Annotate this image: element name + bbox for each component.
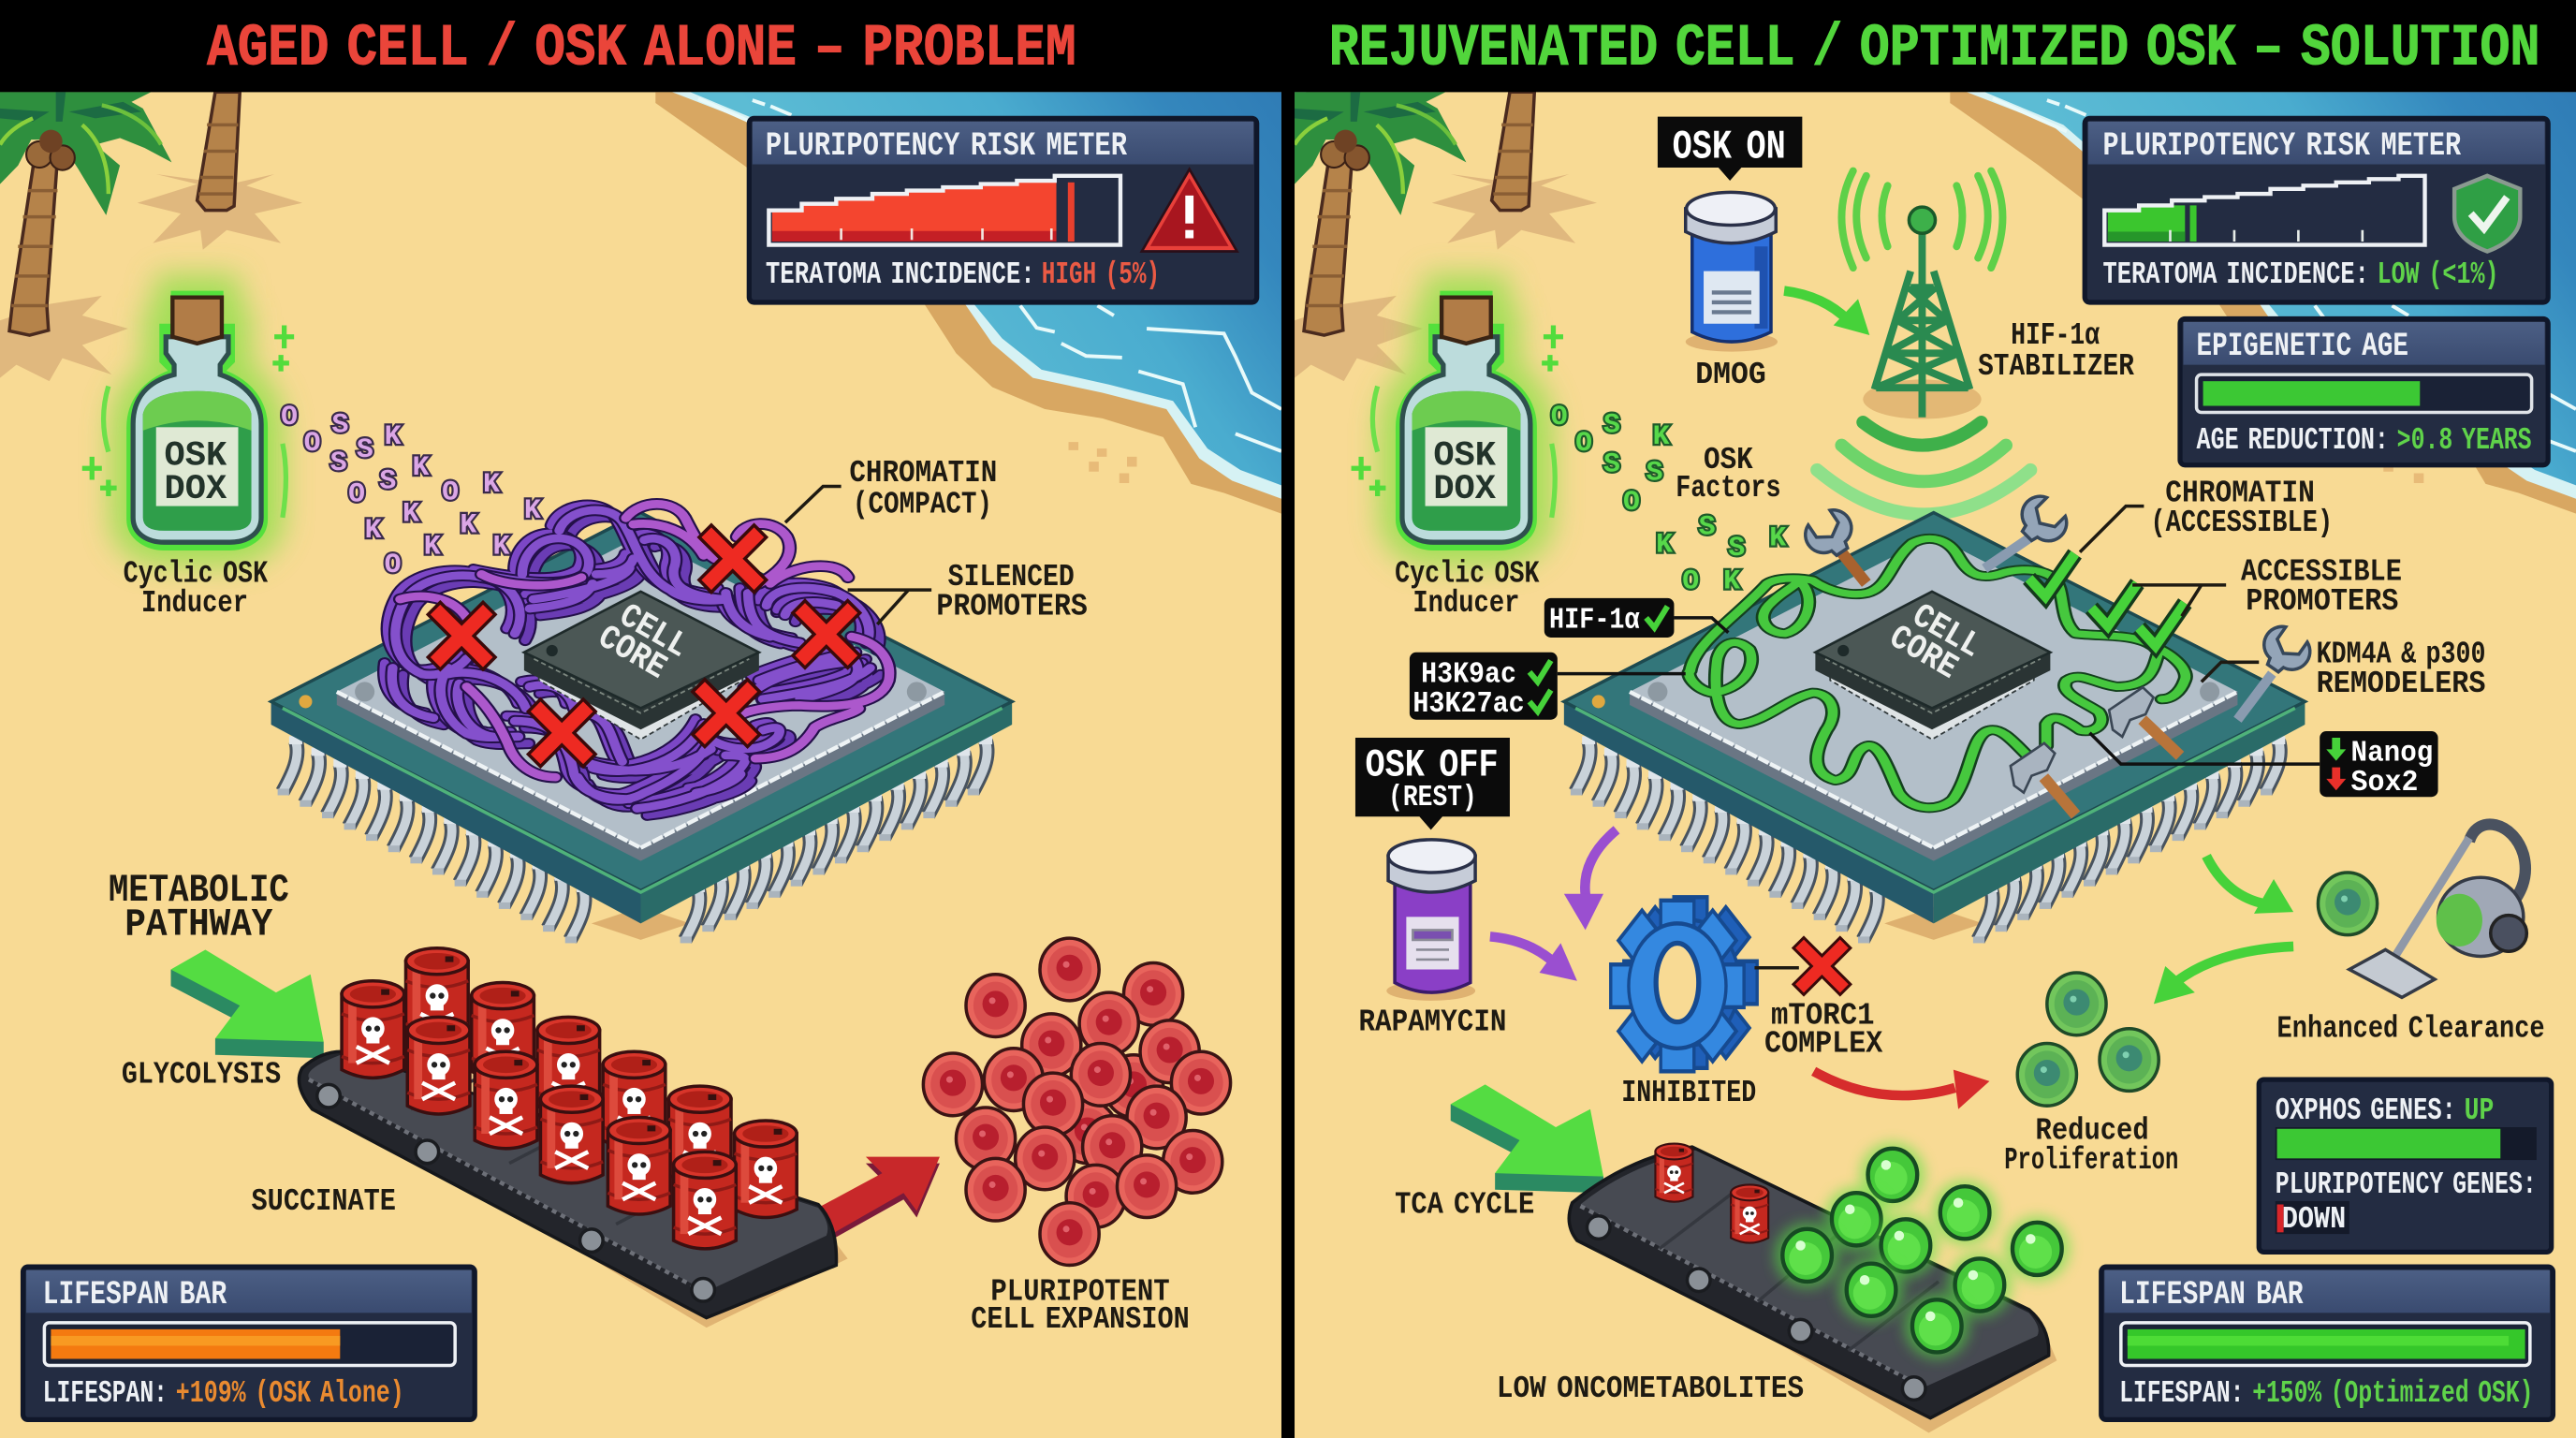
panel: lifespan bar left: +109% (OSK Alone) (176, 1376, 404, 1412)
icon: OSK DOX bottle left: OSK (165, 437, 227, 477)
label: cyclic OSK inducer left: Inducer (141, 586, 248, 622)
OSK factor letters right: O (1575, 427, 1592, 459)
OSK factor letters right: S (1728, 532, 1745, 564)
icon: rapamycin purple bottle (1386, 840, 1475, 1001)
label: mTORC1 complex (1764, 998, 1882, 1062)
label: HIF-1a stabilizer: STABILIZER (1978, 349, 2134, 385)
chip board left (271, 513, 1012, 943)
OSK factor letters left: S (357, 433, 373, 465)
OSK factor letters right: O (1623, 486, 1640, 518)
panel: epigenetic age: AGE REDUCTION: (2197, 423, 2389, 459)
label: cyclic OSK inducer left: Cyclic OSK (124, 556, 268, 592)
tag: histone marks: H3K9ac (1421, 658, 1516, 691)
OSK factor letters left: K (402, 497, 419, 529)
label: KDM4A p300 remodelers: REMODELERS (2317, 667, 2485, 702)
label: pluripotent cell expansion: PLURIPOTENT (990, 1274, 1170, 1310)
OSK factor letters right: K (1656, 529, 1673, 561)
callout: OSK OFF rest: OSK OFF (1365, 742, 1499, 787)
conveyor belt right (1569, 1147, 2056, 1432)
label: KDM4A p300 remodelers (2202, 637, 2485, 702)
icon: HIF-1a radio tower (1863, 207, 1982, 419)
OSK factor letters right: K (1723, 565, 1740, 596)
panel: lifespan bar left: LIFESPAN BAR (43, 1276, 227, 1313)
title: problem: AGED CELL / OSK ALONE – PROBLEM (207, 14, 1076, 81)
OSK factor letters left: K (413, 451, 430, 483)
label: glycolysis: GLYCOLYSIS (122, 1058, 281, 1093)
label: accessible promoters (2132, 555, 2402, 620)
label: inhibited: INHIBITED (1621, 1076, 1756, 1111)
pluripotent red cell cluster (923, 938, 1231, 1265)
panel: lifespan bar left (23, 1267, 475, 1419)
cell core chip left: CORE (591, 618, 673, 688)
arrow: purple rapamycin down (1564, 829, 1617, 930)
label: OSK factors: OSK (1704, 443, 1753, 478)
tag: histone marks (1410, 653, 1686, 721)
cell core chip left (524, 592, 759, 740)
accessible promoter checkmarks (2029, 553, 2185, 646)
OSK factor letters left (281, 401, 541, 580)
panel: lifespan bar left: LIFESPAN: (43, 1376, 168, 1412)
label: silenced promoters: SILENCED (948, 560, 1075, 595)
callout: OSK ON: OSK ON (1673, 124, 1786, 170)
OSK factor letters left: K (483, 468, 500, 500)
label: succinate: SUCCINATE (252, 1184, 396, 1220)
panel: aged cell beach background (0, 92, 1306, 1438)
arrow: purple rapamycin right (1490, 936, 1577, 981)
icon: warning triangle (1142, 169, 1237, 252)
panel: pluripotency risk meter high (749, 118, 1257, 302)
OSK factor letters right: S (1603, 409, 1620, 441)
cell core chip right: CELL (1905, 596, 1987, 667)
panel: lifespan bar right: LIFESPAN: (2119, 1376, 2244, 1412)
OSK factor letters left: S (332, 409, 348, 441)
chip board right (1564, 513, 2305, 943)
panel: epigenetic age: EPIGENETIC AGE (2197, 328, 2408, 365)
tag: Nanog Sox2 down (2089, 731, 2438, 800)
callout: OSK OFF rest: (REST) (1388, 782, 1477, 814)
icon: OSK DOX bottle left: DOX (165, 470, 227, 509)
icon: DMOG blue bottle (1686, 192, 1778, 352)
open chromatin green strand (1689, 538, 2186, 808)
panel: gene expression: OXPHOS GENES: (2276, 1093, 2456, 1129)
label: pluripotent cell expansion (971, 1274, 1190, 1338)
panel: pluripotency risk meter low: TERATOMA INCIDENCE: (2103, 257, 2369, 293)
tag: histone marks: H3K27ac (1412, 688, 1525, 721)
OSK factor letters left: K (424, 530, 441, 562)
icon: wrenches and remodelers (1799, 490, 2316, 815)
panel: pluripotency risk meter high: HIGH (5%) (1042, 257, 1160, 293)
OSK factor letters left: K (385, 420, 402, 452)
chromatin tangle compact (384, 504, 889, 815)
panel: pluripotency risk meter high: PLURIPOTENCY RISK METER (766, 127, 1128, 165)
label: cyclic OSK inducer right: Cyclic OSK (1395, 556, 1540, 592)
OSK factor letters right: K (1769, 522, 1786, 554)
label: accessible promoters: PROMOTERS (2246, 584, 2398, 620)
label: OSK factors: Factors (1676, 471, 1781, 506)
panel: lifespan bar right (2101, 1267, 2553, 1419)
label: rapamycin: RAPAMYCIN (1358, 1005, 1506, 1040)
panel: gene expression (2259, 1079, 2552, 1252)
healthy green metabolite orbs (1775, 1142, 2070, 1358)
label: low oncometabolites: LOW ONCOMETABOLITES (1497, 1372, 1804, 1407)
label: mTORC1 complex: COMPLEX (1764, 1026, 1882, 1062)
arrow: red to expansion (818, 1157, 940, 1239)
tag: Nanog Sox2 down: Nanog (2351, 738, 2433, 770)
label: KDM4A p300 remodelers: KDM4A & p300 (2317, 637, 2485, 672)
OSK factor letters right: S (1647, 456, 1663, 488)
OSK factor letters right: O (1682, 565, 1699, 596)
signal waves to chip (1817, 422, 2030, 514)
icon: mTORC1 gear (1611, 897, 1757, 1071)
meter gauge low (2104, 176, 2425, 245)
arrow: TCA cycle input (1451, 1084, 1603, 1193)
cell core chip left: CELL (612, 596, 695, 667)
label: chromatin accessible (2080, 476, 2333, 552)
label: silenced promoters (848, 560, 1088, 624)
label: cyclic OSK inducer right (1395, 556, 1540, 622)
label: accessible promoters: ACCESSIBLE (2241, 555, 2402, 591)
OSK factor letters left: O (385, 549, 402, 580)
icon: OSK DOX bottle right: OSK (1433, 437, 1497, 477)
panel: pluripotency risk meter low: PLURIPOTENCY RISK METER (2103, 127, 2462, 165)
cell core chip right: CORE (1882, 618, 1964, 688)
label: reduced proliferation: Proliferation (2004, 1143, 2178, 1179)
OSK factor letters left: S (330, 447, 347, 478)
OSK factor letters right (1551, 401, 1786, 596)
signal waves around tower (1841, 171, 2002, 268)
icon: OSK DOX bottle right (1352, 292, 1563, 549)
OSK factor letters right: O (1551, 401, 1568, 433)
label: HIF-1a stabilizer: HIF-1α (2011, 318, 2100, 354)
toxic succinate barrels (342, 948, 797, 1249)
tag: HIF-1a check: HIF-1α (1549, 604, 1640, 637)
reduced proliferation green cells (2017, 973, 2159, 1106)
OSK factor letters right: K (1653, 420, 1670, 452)
panel: rejuvenated cell beach background (1292, 92, 2576, 1438)
icon: vacuum cleaner (2349, 825, 2526, 997)
label: mTORC1 complex: mTORC1 (1771, 998, 1875, 1034)
label: silenced promoters: PROMOTERS (936, 589, 1088, 624)
label: chromatin compact: (COMPACT) (853, 488, 992, 523)
heading: metabolic pathway: PATHWAY (124, 902, 273, 947)
silenced promoter X marks (440, 537, 848, 755)
OSK factor letters left: K (365, 514, 382, 546)
OSK factor letters right: S (1699, 510, 1716, 542)
label: chromatin compact (785, 456, 997, 523)
label: cyclic OSK inducer left (124, 556, 268, 622)
icon: OSK DOX bottle left (82, 292, 294, 549)
mTORC1 inhibition X (1754, 948, 1840, 984)
OSK factor letters left: K (524, 494, 541, 526)
panel: gene expression: UP (2465, 1093, 2494, 1129)
label: chromatin compact: CHROMATIN (849, 456, 997, 492)
label: TCA cycle: TCA CYCLE (1395, 1187, 1534, 1223)
callout: OSK ON (1658, 117, 1802, 181)
arrow: DMOG to stabilizer (1784, 291, 1869, 335)
reduced barrels (1655, 1144, 1768, 1243)
label: reduced proliferation: Reduced (2036, 1113, 2149, 1149)
panel: epigenetic age: >0.8 YEARS (2397, 423, 2532, 459)
label: OSK factors (1676, 443, 1781, 506)
OSK factor letters left: O (304, 427, 321, 459)
heading: metabolic pathway (109, 868, 289, 947)
tag: Nanog Sox2 down: Sox2 (2351, 767, 2419, 800)
meter gauge high (768, 176, 1120, 245)
arrow: green to clearance (2206, 856, 2293, 914)
arrow: green from clearance (2154, 946, 2293, 1004)
OSK factor letters right: S (1603, 448, 1620, 480)
label: reduced proliferation (2004, 1113, 2178, 1179)
label: DMOG: DMOG (1695, 358, 1766, 393)
label: pluripotent cell expansion: CELL EXPANSION (971, 1302, 1190, 1338)
panel: pluripotency risk meter low: LOW (<1%) (2378, 257, 2499, 293)
OSK factor letters left: O (442, 477, 459, 508)
label: cyclic OSK inducer right: Inducer (1412, 586, 1519, 622)
OSK factor letters left: K (460, 509, 476, 541)
callout: OSK OFF rest (1355, 738, 1510, 829)
panel: gene expression: DOWN (2282, 1202, 2346, 1238)
tag: HIF-1a check (1544, 598, 1728, 638)
OSK factor letters left: O (281, 401, 298, 433)
cell core chip right (1815, 592, 2050, 740)
panel: pluripotency risk meter high: TERATOMA INCIDENCE: (766, 257, 1035, 293)
cell being cleared (2318, 873, 2378, 935)
icon: OSK DOX bottle right: DOX (1433, 470, 1497, 509)
heading: metabolic pathway: METABOLIC (109, 868, 289, 913)
OSK factor letters left: O (348, 477, 365, 509)
panel: pluripotency risk meter low (2085, 118, 2548, 302)
label: HIF-1a stabilizer (1978, 318, 2134, 385)
OSK factor letters left: K (493, 530, 510, 562)
conveyor belt left (299, 1051, 848, 1328)
label: chromatin accessible: CHROMATIN (2165, 476, 2315, 511)
panel: epigenetic age (2180, 318, 2548, 465)
panel: lifespan bar right: LIFESPAN BAR (2119, 1276, 2304, 1313)
icon: shield check (2454, 176, 2520, 252)
arrow: glycolysis input (171, 949, 324, 1058)
OSK factor letters left: S (379, 464, 396, 496)
label: chromatin accessible: (ACCESSIBLE) (2150, 506, 2333, 541)
arrow: red to reduced proliferation (1814, 1070, 1989, 1109)
